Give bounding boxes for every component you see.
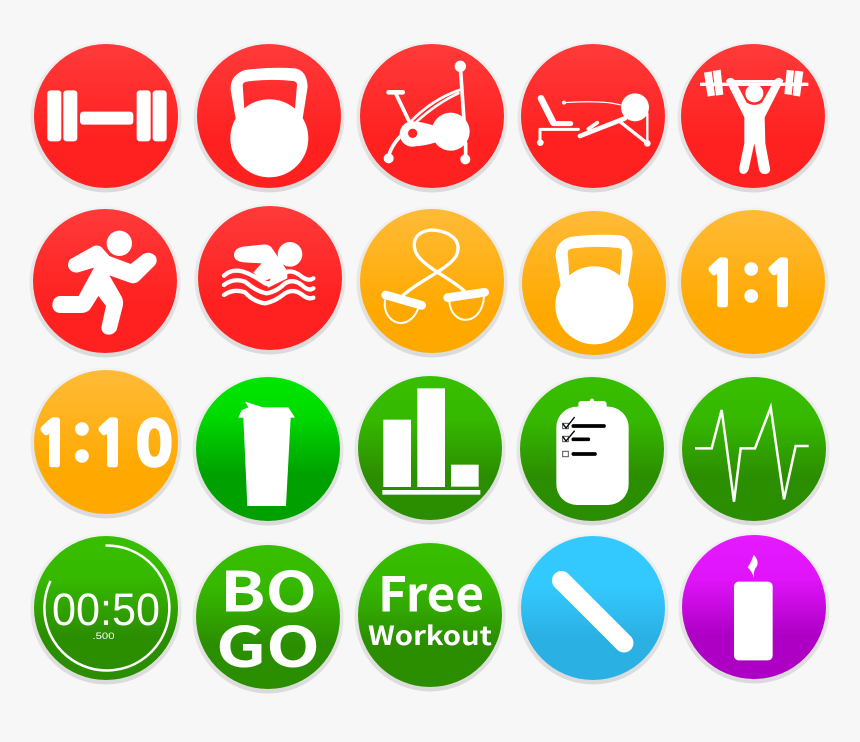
label: GO: GO (216, 602, 320, 682)
icon: weightlifter (700, 70, 808, 174)
icon: clipboard checklist (556, 399, 629, 505)
label: Workout: Workout (368, 616, 492, 653)
icon: runner (52, 231, 157, 335)
icon: dumbbell (47, 90, 167, 141)
badge: pulse line (678, 374, 830, 526)
badge: candle (678, 532, 830, 684)
badge: resistance bands (356, 206, 508, 358)
badge: ratio 1:10 (30, 368, 182, 518)
badge: shaker cup (192, 374, 344, 526)
icon: rowing machine (537, 93, 651, 147)
badge: exercise bike (356, 42, 508, 192)
label: Free: Free (378, 556, 484, 626)
icon: pulse line (695, 407, 809, 502)
icon: swimmer (224, 242, 313, 303)
icon: bar chart (382, 388, 480, 495)
icon: timer arc (44, 545, 169, 670)
label: 1:1: 1:1 (703, 255, 799, 314)
badge: pill bar (518, 534, 668, 684)
icon: exercise bike (384, 61, 470, 164)
label: BO: BO (220, 548, 317, 628)
badge: clipboard checklist (516, 374, 668, 526)
label: milliseconds: .500 (92, 631, 114, 641)
icon: kettlebell (230, 68, 308, 177)
label: timer digits: 00:50 (52, 584, 160, 635)
icon: kettlebell (555, 235, 633, 344)
badge: timer (30, 534, 182, 684)
badge: free workout (354, 540, 506, 692)
icon: candle (734, 555, 773, 660)
badge: rowing machine (518, 42, 668, 192)
badge: runner (30, 206, 180, 358)
badge: weightlifter (678, 42, 828, 192)
badge: ratio 1:1 (678, 208, 828, 358)
badge: bar chart (354, 374, 506, 524)
badge: BOGO (192, 542, 344, 694)
icon: shaker cup (238, 402, 295, 506)
icon: resistance bands (385, 230, 485, 323)
badge: dumbbell (30, 42, 182, 192)
icon: pill bar (562, 580, 624, 643)
badge: kettlebell red (194, 42, 344, 192)
badge: kettlebell orange (518, 208, 670, 360)
badge: swimmer (194, 204, 346, 354)
label: 1:10: 1:10 (35, 415, 172, 474)
